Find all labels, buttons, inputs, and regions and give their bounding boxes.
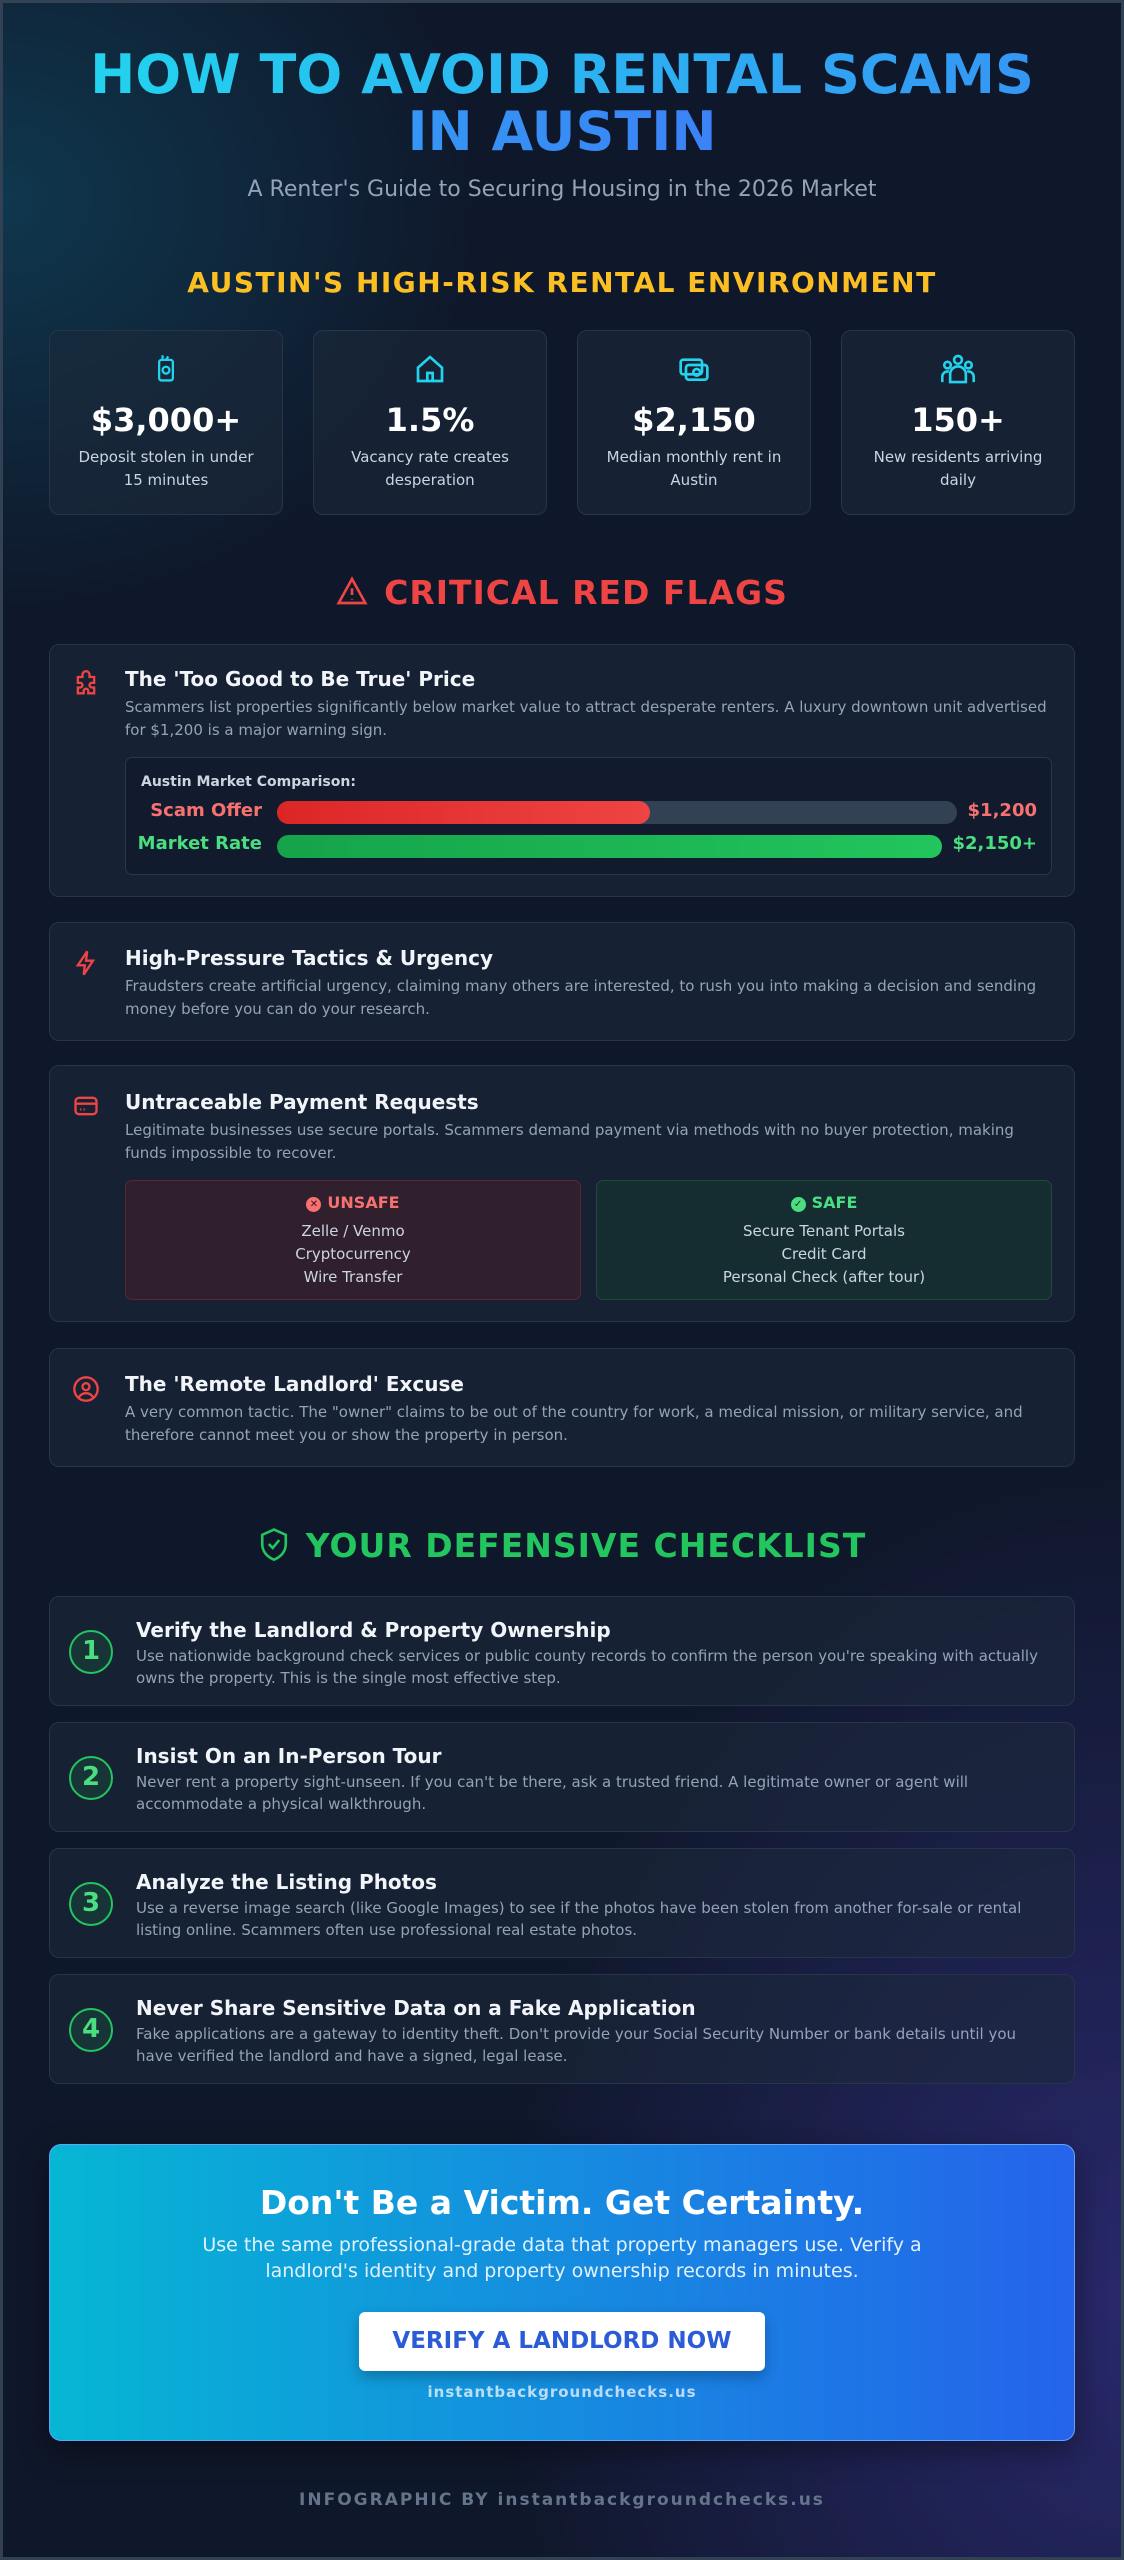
checklist item 1 (49, 1596, 1075, 1706)
title: IN AUSTIN (407, 100, 717, 163)
checklist item 4: Never Share Sensitive Data on a Fake Application (136, 1996, 696, 2020)
chart: market comparison: $2,150+ (952, 833, 1037, 854)
chart: market comparison: Scam Offer (150, 800, 262, 821)
button (359, 2312, 765, 2371)
box: safe (596, 1180, 1052, 1300)
subtitle: A Renter's Guide to Securing Housing in the 2026 Market (248, 177, 876, 202)
box: unsafe: Wire Transfer (304, 1268, 402, 1286)
title: HOW TO AVOID RENTAL SCAMS (90, 43, 1034, 106)
panel: remote landlord (49, 1348, 1075, 1467)
checklist item 3: Use a reverse image search (like Google Images) to see if the photos have been stolen from another for-sale or rental listing online. Scammers often use professional real estate photos. (136, 1899, 1021, 1939)
box: unsafe (125, 1180, 581, 1300)
stat: deposit: Deposit stolen in under 15 minutes (78, 448, 254, 489)
chart: market comparison: Austin Market Comparison: (141, 774, 356, 790)
panel: high pressure: Fraudsters create artificial urgency, claiming many others are interested, to rush you into making a decision and sending money before you can do your research. (125, 977, 1036, 1018)
checklist item 4: Fake applications are a gateway to identity theft. Don't provide your Social Security Number or bank details until you have verified the landlord and have a signed, legal lease. (136, 2025, 1016, 2065)
panel: too good price: The 'Too Good to Be True' Price (125, 667, 475, 691)
box: unsafe: UNSAFE (327, 1193, 400, 1212)
panel: payments: Untraceable Payment Requests (125, 1090, 479, 1114)
box: unsafe: ✕ (310, 1199, 318, 1210)
icon: user circle (73, 1376, 99, 1402)
checklist item 2: Insist On an In-Person Tour (136, 1744, 442, 1768)
heading: checklist: YOUR DEFENSIVE CHECKLIST (306, 1526, 866, 1565)
icon: puzzle (76, 670, 96, 694)
box: safe: ✓ (794, 1199, 802, 1210)
panel: high pressure: High-Pressure Tactics & Urgency (125, 946, 493, 970)
heading: environment: AUSTIN'S HIGH-RISK RENTAL ENVIRONMENT (187, 266, 937, 299)
icon: card (74, 1096, 98, 1116)
panel: payments (49, 1065, 1075, 1322)
icon: money (158, 355, 174, 382)
box: safe: Secure Tenant Portals (743, 1222, 905, 1240)
box: safe: Personal Check (after tour) (723, 1268, 925, 1286)
stat: residents: New residents arriving daily (874, 448, 1042, 489)
stat: vacancy: Vacancy rate creates desperation (351, 448, 509, 489)
box: unsafe: Cryptocurrency (295, 1245, 411, 1263)
icon: house (416, 355, 444, 382)
checklist item 3: Analyze the Listing Photos (136, 1870, 437, 1894)
stat: deposit: $3,000+ (91, 401, 241, 439)
panel: too good price (49, 644, 1075, 897)
checklist item 1: Use nationwide background check services or public county records to confirm the person you're speaking with actually owns the property. This is the single most effective step. (136, 1647, 1038, 1687)
icon: people (941, 354, 975, 384)
checklist item 2: 2 (82, 1762, 100, 1792)
panel: high pressure (49, 922, 1075, 1041)
chart: market comparison: Market Rate (138, 833, 262, 854)
callout: CTA: instantbackgroundchecks.us (428, 2383, 696, 2401)
callout: CTA: Don't Be a Victim. Get Certainty. (260, 2183, 864, 2222)
chart: market comparison: $1,200 (968, 800, 1037, 821)
callout: CTA: Use the same professional-grade data that property managers use. Verify a landlord's identity and property ownership records in minutes. (202, 2234, 922, 2282)
panel: remote landlord: The 'Remote Landlord' Excuse (125, 1372, 464, 1396)
checklist item 3: 3 (82, 1888, 100, 1918)
panel: too good price: Scammers list properties significantly below market value to attract desperate renters. A luxury downtown unit advertised for $1,200 is a major warning sign. (125, 698, 1047, 739)
panel: payments: Legitimate businesses use secure portals. Scammers demand payment via methods with no buyer protection, making funds impossible to recover. (125, 1121, 1014, 1162)
checklist item 3 (49, 1848, 1075, 1958)
chart: market comparison (125, 757, 1052, 875)
stat: residents (841, 330, 1075, 515)
panel: remote landlord: A very common tactic. The "owner" claims to be out of the country for work, a medical mission, or military service, and therefore cannot meet you or show the property in person. (125, 1403, 1023, 1444)
stat: rent (577, 330, 811, 515)
icon: lightning (76, 950, 96, 976)
box: unsafe: Zelle / Venmo (301, 1222, 405, 1240)
footer: INFOGRAPHIC BY instantbackgroundchecks.us (299, 2490, 825, 2510)
box: safe: Credit Card (782, 1245, 866, 1263)
button: VERIFY A LANDLORD NOW (392, 2328, 732, 2354)
callout: CTA (49, 2144, 1075, 2441)
title (90, 43, 1034, 163)
checklist item 4 (49, 1974, 1075, 2084)
stat: deposit (49, 330, 283, 515)
stat: vacancy: 1.5% (386, 401, 474, 439)
stat: vacancy (313, 330, 547, 515)
box: safe: SAFE (812, 1193, 857, 1212)
stat: rent: Median monthly rent in Austin (607, 448, 781, 489)
checklist item 4: 4 (82, 2014, 100, 2044)
stat: rent: $2,150 (632, 401, 756, 439)
checklist item 2: Never rent a property sight-unseen. If you can't be there, ask a trusted friend. A legitimate owner or agent will accommodate a physical walkthrough. (136, 1773, 968, 1813)
icon: cash (679, 358, 709, 381)
checklist item 1: 1 (82, 1636, 100, 1666)
checklist item 2 (49, 1722, 1075, 1832)
stat: residents: 150+ (911, 401, 1005, 439)
checklist item 1: Verify the Landlord & Property Ownership (136, 1618, 611, 1642)
heading: red flags: CRITICAL RED FLAGS (384, 573, 788, 612)
